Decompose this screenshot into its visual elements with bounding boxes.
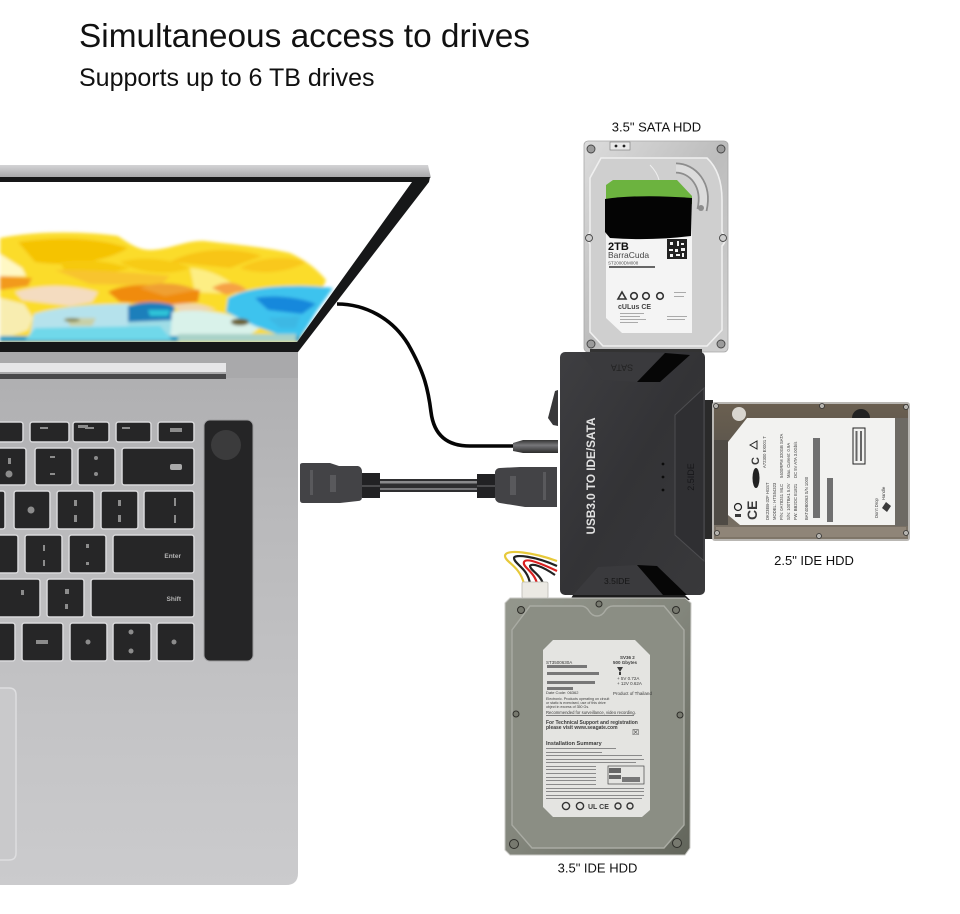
label text blocks: or static is exercised, use of this drive [546, 701, 606, 705]
key legends [6, 425, 182, 654]
certification marks [618, 292, 663, 299]
drive: 3.5 IDE HDD [505, 598, 691, 855]
label text blocks: Recommended for surveillance, video recording. [546, 710, 636, 715]
3.5 IDE port recess [573, 565, 687, 595]
sticker [853, 428, 865, 464]
audio jack [513, 440, 558, 453]
corner screws [586, 145, 726, 348]
qr code [667, 239, 687, 259]
label text blocks: 500 Gbytes [613, 660, 638, 665]
power key strip [204, 420, 253, 661]
label markings: MODEL: HTS54323 [772, 482, 777, 520]
label text blocks: Product of Thailand [613, 691, 652, 696]
label black block [605, 196, 692, 239]
label: 2.5 IDE HDD: 2.5" IDE HDD [774, 553, 854, 568]
warning triangle [750, 441, 757, 449]
3.5 IDE port recess: 3.5IDE [604, 576, 630, 586]
label text blocks [546, 655, 652, 811]
label markings: Handle [881, 486, 886, 500]
hinge [0, 352, 298, 379]
laptop [0, 165, 431, 885]
connector detail [610, 142, 630, 150]
title: Simultaneous access to drives [79, 18, 530, 55]
fine print [620, 292, 687, 323]
SATA port recess: SATA [611, 363, 633, 373]
left strain relief [362, 473, 380, 498]
rotated text: DK23EB-32F HGST [765, 482, 770, 520]
key labels: Enter [164, 553, 181, 560]
drive: 2.5 IDE HDD [704, 400, 910, 541]
label markings [734, 428, 891, 522]
connector strip [704, 400, 713, 539]
audio cable [337, 304, 558, 453]
subtitle: Supports up to 6 TB drives [79, 64, 375, 92]
capacity: 2TB [608, 241, 629, 253]
label markings: BAT40B0063 S/N 1000 [804, 476, 809, 520]
label text blocks: Date Code: 06362 [546, 690, 579, 695]
label text blocks: + 12V 0.62A [617, 681, 642, 686]
key labels: Shift [167, 596, 182, 603]
USB to IDE/SATA adapter [548, 352, 705, 600]
label markings: S/N: 100TBA1 5.0V [786, 483, 791, 520]
keyboard [0, 422, 194, 661]
USB cable [300, 463, 557, 507]
label text blocks: UL CE [588, 804, 609, 811]
label markings: DC 5V ATA 3.0Gb/s [793, 442, 798, 478]
small badge [734, 504, 742, 510]
adapter name: USB3.0 TO IDE/SATA [584, 417, 598, 534]
left USB plug [300, 463, 362, 503]
raised outline [588, 158, 725, 346]
compliance icons [562, 802, 633, 810]
label [605, 180, 692, 333]
right strain relief [477, 474, 495, 498]
SATA port recess [580, 353, 690, 382]
2.5 IDE port recess: 2.5IDE [686, 463, 696, 491]
thin seam [650, 165, 659, 180]
model name: BarraCuda [608, 250, 649, 260]
instruction lines [546, 748, 644, 799]
label: 3.5 IDE HDD: 3.5" IDE HDD [558, 860, 637, 876]
oval logo [752, 468, 760, 488]
label text blocks: ☒ [632, 728, 639, 737]
screws [714, 404, 908, 538]
label markings: P/N: 0A78241 MLC [779, 484, 784, 520]
CE mark: CE [744, 501, 760, 520]
logo mark: C [750, 457, 762, 465]
barcodes [813, 438, 833, 522]
label markings: A72300 EX001 T [762, 436, 767, 468]
SATA connector [590, 349, 702, 354]
raised plate [512, 606, 684, 848]
arc slot [676, 168, 704, 211]
drive: 3.5 SATA HDD [584, 141, 728, 354]
barcodes [547, 665, 599, 690]
label text blocks: SV36 2 [620, 655, 635, 660]
label markings: FW: BB2OC E1821 [793, 483, 798, 520]
right USB plug [495, 467, 557, 507]
label text blocks: Electronic. Products operating on circuit [546, 697, 609, 701]
label text blocks: For Technical Support and registration [546, 720, 638, 726]
power connector with wires [505, 552, 557, 598]
spindle cap [732, 407, 746, 421]
label: 3.5 SATA HDD: 3.5" SATA HDD [612, 120, 701, 134]
label text blocks: ST3500630A [546, 660, 572, 665]
side switch [548, 390, 558, 426]
2.5 IDE port recess [675, 388, 704, 561]
barcode [609, 266, 655, 268]
label markings: 5400RPM 320GB SATA [779, 433, 784, 478]
label [728, 418, 895, 525]
screen wallpaper [0, 232, 333, 344]
label green band [606, 180, 692, 204]
corner logo [882, 502, 891, 512]
label text blocks: + 5V 0.72A [617, 676, 639, 681]
cable wire [380, 479, 478, 492]
label markings: Don't Drop [874, 497, 879, 518]
trackpad [0, 688, 16, 860]
screws [510, 601, 683, 848]
label markings: Max. Current: 0.9A [786, 443, 791, 478]
bottom connector [570, 595, 690, 600]
label text blocks: please visit www.seagate.com [546, 725, 618, 731]
laptop lid frame [0, 165, 431, 352]
label [543, 640, 650, 817]
label text blocks: object in excess of 350 Gs. [546, 705, 589, 709]
laptop base [0, 352, 298, 885]
label text blocks: Installation Summary [546, 741, 603, 747]
key labels [164, 553, 182, 603]
compliance text: cULus CE [618, 304, 651, 311]
status LEDs [662, 463, 664, 491]
jumper diagram [608, 766, 644, 784]
part number: ST2000DM008 [608, 260, 639, 266]
